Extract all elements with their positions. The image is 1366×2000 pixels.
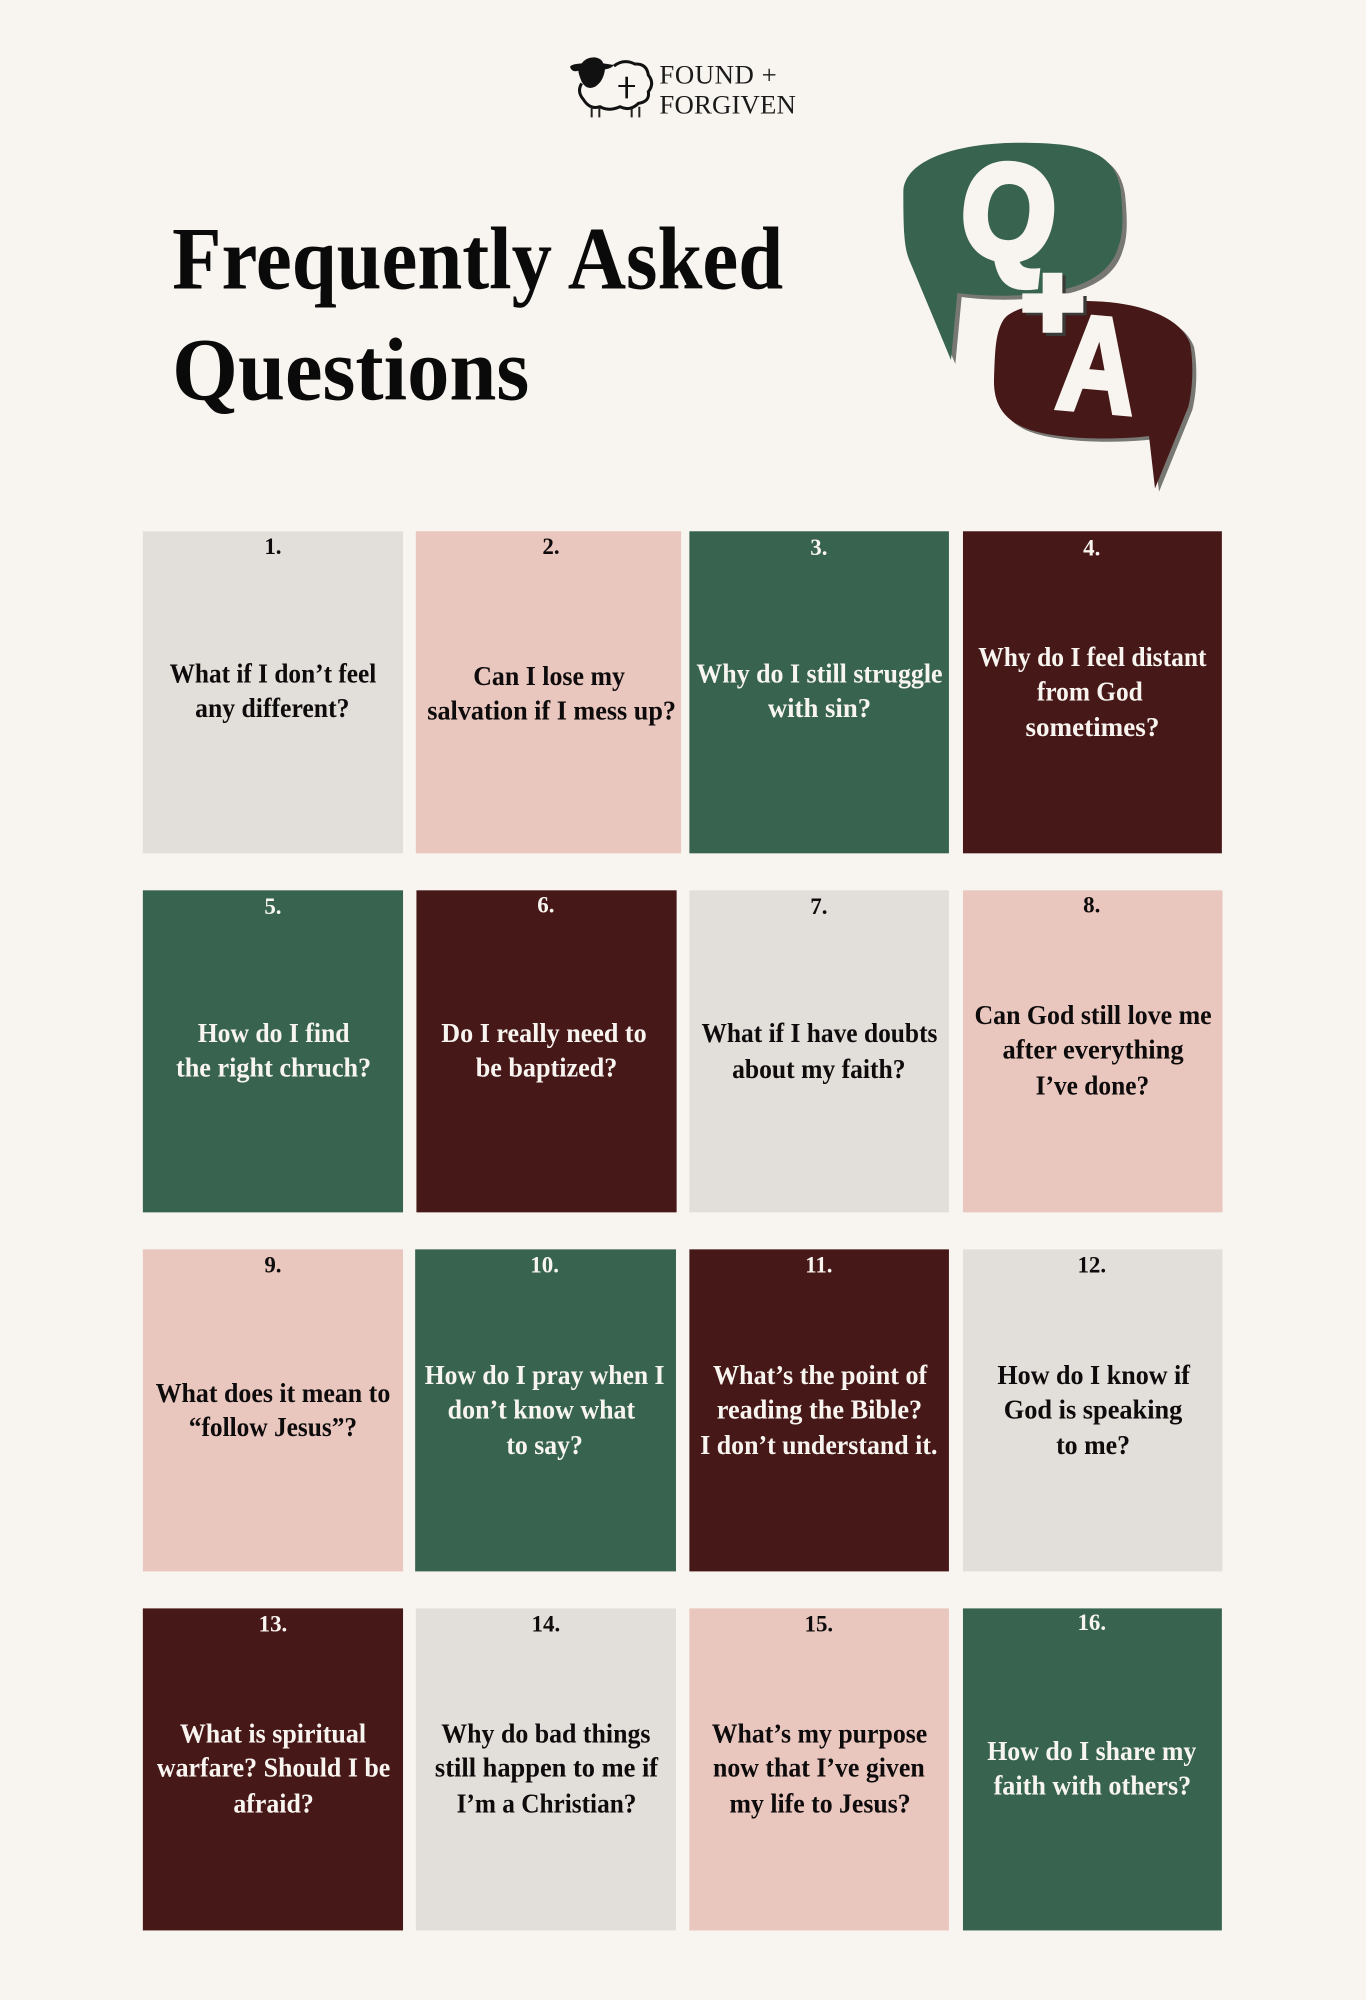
number 16: 16. (1077, 1610, 1106, 1635)
question 4: Why do I feel distant (978, 642, 1207, 672)
question 2: salvation if I mess up? (427, 695, 676, 725)
question 15: my life to Jesus? (730, 1788, 911, 1818)
green question bubble: Q (955, 133, 1063, 291)
question 7: about my faith? (732, 1054, 906, 1084)
question 9 (156, 1378, 390, 1442)
logo: Found + Forgiven (570, 57, 796, 120)
question 15: What’s my purpose (712, 1718, 927, 1748)
question 4: from God (1037, 676, 1143, 706)
question 8: after everything (1002, 1035, 1184, 1065)
question 12: How do I know if (997, 1360, 1191, 1390)
question 16: How do I share my (987, 1736, 1197, 1766)
number 6: 6. (537, 893, 554, 918)
card 3 (689, 531, 949, 853)
question 10 (425, 1360, 665, 1460)
question 7 (701, 1018, 937, 1084)
question 1 (170, 658, 377, 723)
card 4 (963, 531, 1222, 853)
question 1: What if I don’t feel (170, 658, 377, 688)
question 10: to say? (506, 1430, 583, 1460)
question 11: What’s the point of (713, 1360, 928, 1390)
card 11 (689, 1249, 949, 1571)
question 5: How do I find (198, 1018, 349, 1048)
title: Questions (172, 320, 529, 419)
maroon answer bubble (994, 285, 1196, 492)
number 15: 15. (804, 1611, 833, 1636)
card 13 (143, 1608, 403, 1930)
question 9: “follow Jesus”? (189, 1412, 357, 1442)
question 2: Can I lose my (473, 661, 625, 691)
number 8: 8. (1083, 893, 1100, 918)
card 2 (416, 531, 681, 853)
number 4: 4. (1083, 536, 1100, 561)
number 11: 11. (805, 1252, 833, 1277)
card 1 (143, 531, 403, 853)
number 9: 9. (264, 1252, 282, 1277)
green question bubble (903, 133, 1127, 364)
card 10 (415, 1249, 676, 1571)
logo wordmark: FOUND + (659, 60, 777, 90)
question 16: faith with others? (994, 1771, 1191, 1801)
number 12: 12. (1077, 1252, 1106, 1277)
question 13: afraid? (233, 1788, 314, 1818)
question 3: Why do I still struggle (696, 658, 943, 688)
question 10: How do I pray when I (425, 1360, 665, 1390)
question 12 (997, 1360, 1191, 1460)
logo wordmark: FORGIVEN (659, 90, 796, 120)
question 15 (712, 1718, 927, 1818)
number 10: 10. (530, 1252, 559, 1277)
question 9: What does it mean to (156, 1378, 390, 1408)
logo wordmark (659, 60, 796, 120)
number 3: 3. (810, 535, 827, 560)
card 6 (416, 890, 677, 1212)
question 8: I’ve done? (1036, 1070, 1149, 1100)
card 8 (963, 890, 1223, 1212)
number 1: 1. (264, 534, 282, 559)
question 3 (696, 658, 943, 723)
question 13: What is spiritual (180, 1718, 366, 1748)
question 14: I’m a Christian? (457, 1788, 636, 1818)
card 9 (143, 1249, 403, 1571)
number 7: 7. (810, 894, 827, 919)
question 6: be baptized? (476, 1053, 617, 1083)
question 16 (987, 1736, 1197, 1801)
question 8 (974, 1000, 1212, 1100)
question 4 (978, 642, 1207, 742)
title: Frequently Asked (172, 209, 783, 308)
question 1: any different? (195, 693, 349, 723)
card 12 (963, 1249, 1223, 1571)
card 15 (689, 1608, 949, 1930)
icon: Q + A speech bubbles (903, 133, 1196, 492)
question 13 (157, 1718, 390, 1818)
icon: sheep with cross (570, 57, 652, 117)
question 14: still happen to me if (435, 1753, 659, 1783)
question 11: I don’t understand it. (700, 1430, 937, 1460)
plus sign (1022, 273, 1087, 336)
question 15: now that I’ve given (713, 1753, 925, 1783)
question 2 (427, 661, 676, 725)
question 10: don’t know what (448, 1394, 635, 1424)
number 13: 13. (259, 1611, 287, 1636)
question 12: to me? (1056, 1430, 1130, 1460)
card 14 (416, 1608, 676, 1930)
question 11: reading the Bible? (717, 1394, 922, 1424)
number 14: 14. (532, 1611, 560, 1636)
question 6 (441, 1018, 647, 1083)
question 5: the right chruch? (176, 1053, 371, 1083)
title (172, 209, 783, 419)
question 3: with sin? (768, 693, 871, 723)
question 13: warfare? Should I be (157, 1753, 390, 1783)
question 4: sometimes? (1025, 712, 1159, 742)
question 14: Why do bad things (441, 1718, 650, 1748)
maroon answer bubble: A (1052, 285, 1143, 443)
card 5 (143, 890, 403, 1212)
question 11 (700, 1360, 937, 1460)
question 6: Do I really need to (441, 1018, 647, 1048)
card 16 (963, 1608, 1222, 1930)
question 7: What if I have doubts (701, 1018, 937, 1048)
question 8: Can God still love me (974, 1000, 1212, 1030)
card 7 (689, 890, 949, 1212)
number 5: 5. (264, 894, 282, 919)
question 14 (435, 1718, 659, 1818)
number 2: 2. (542, 534, 560, 559)
question 5 (176, 1018, 371, 1083)
question 12: God is speaking (1004, 1394, 1183, 1424)
